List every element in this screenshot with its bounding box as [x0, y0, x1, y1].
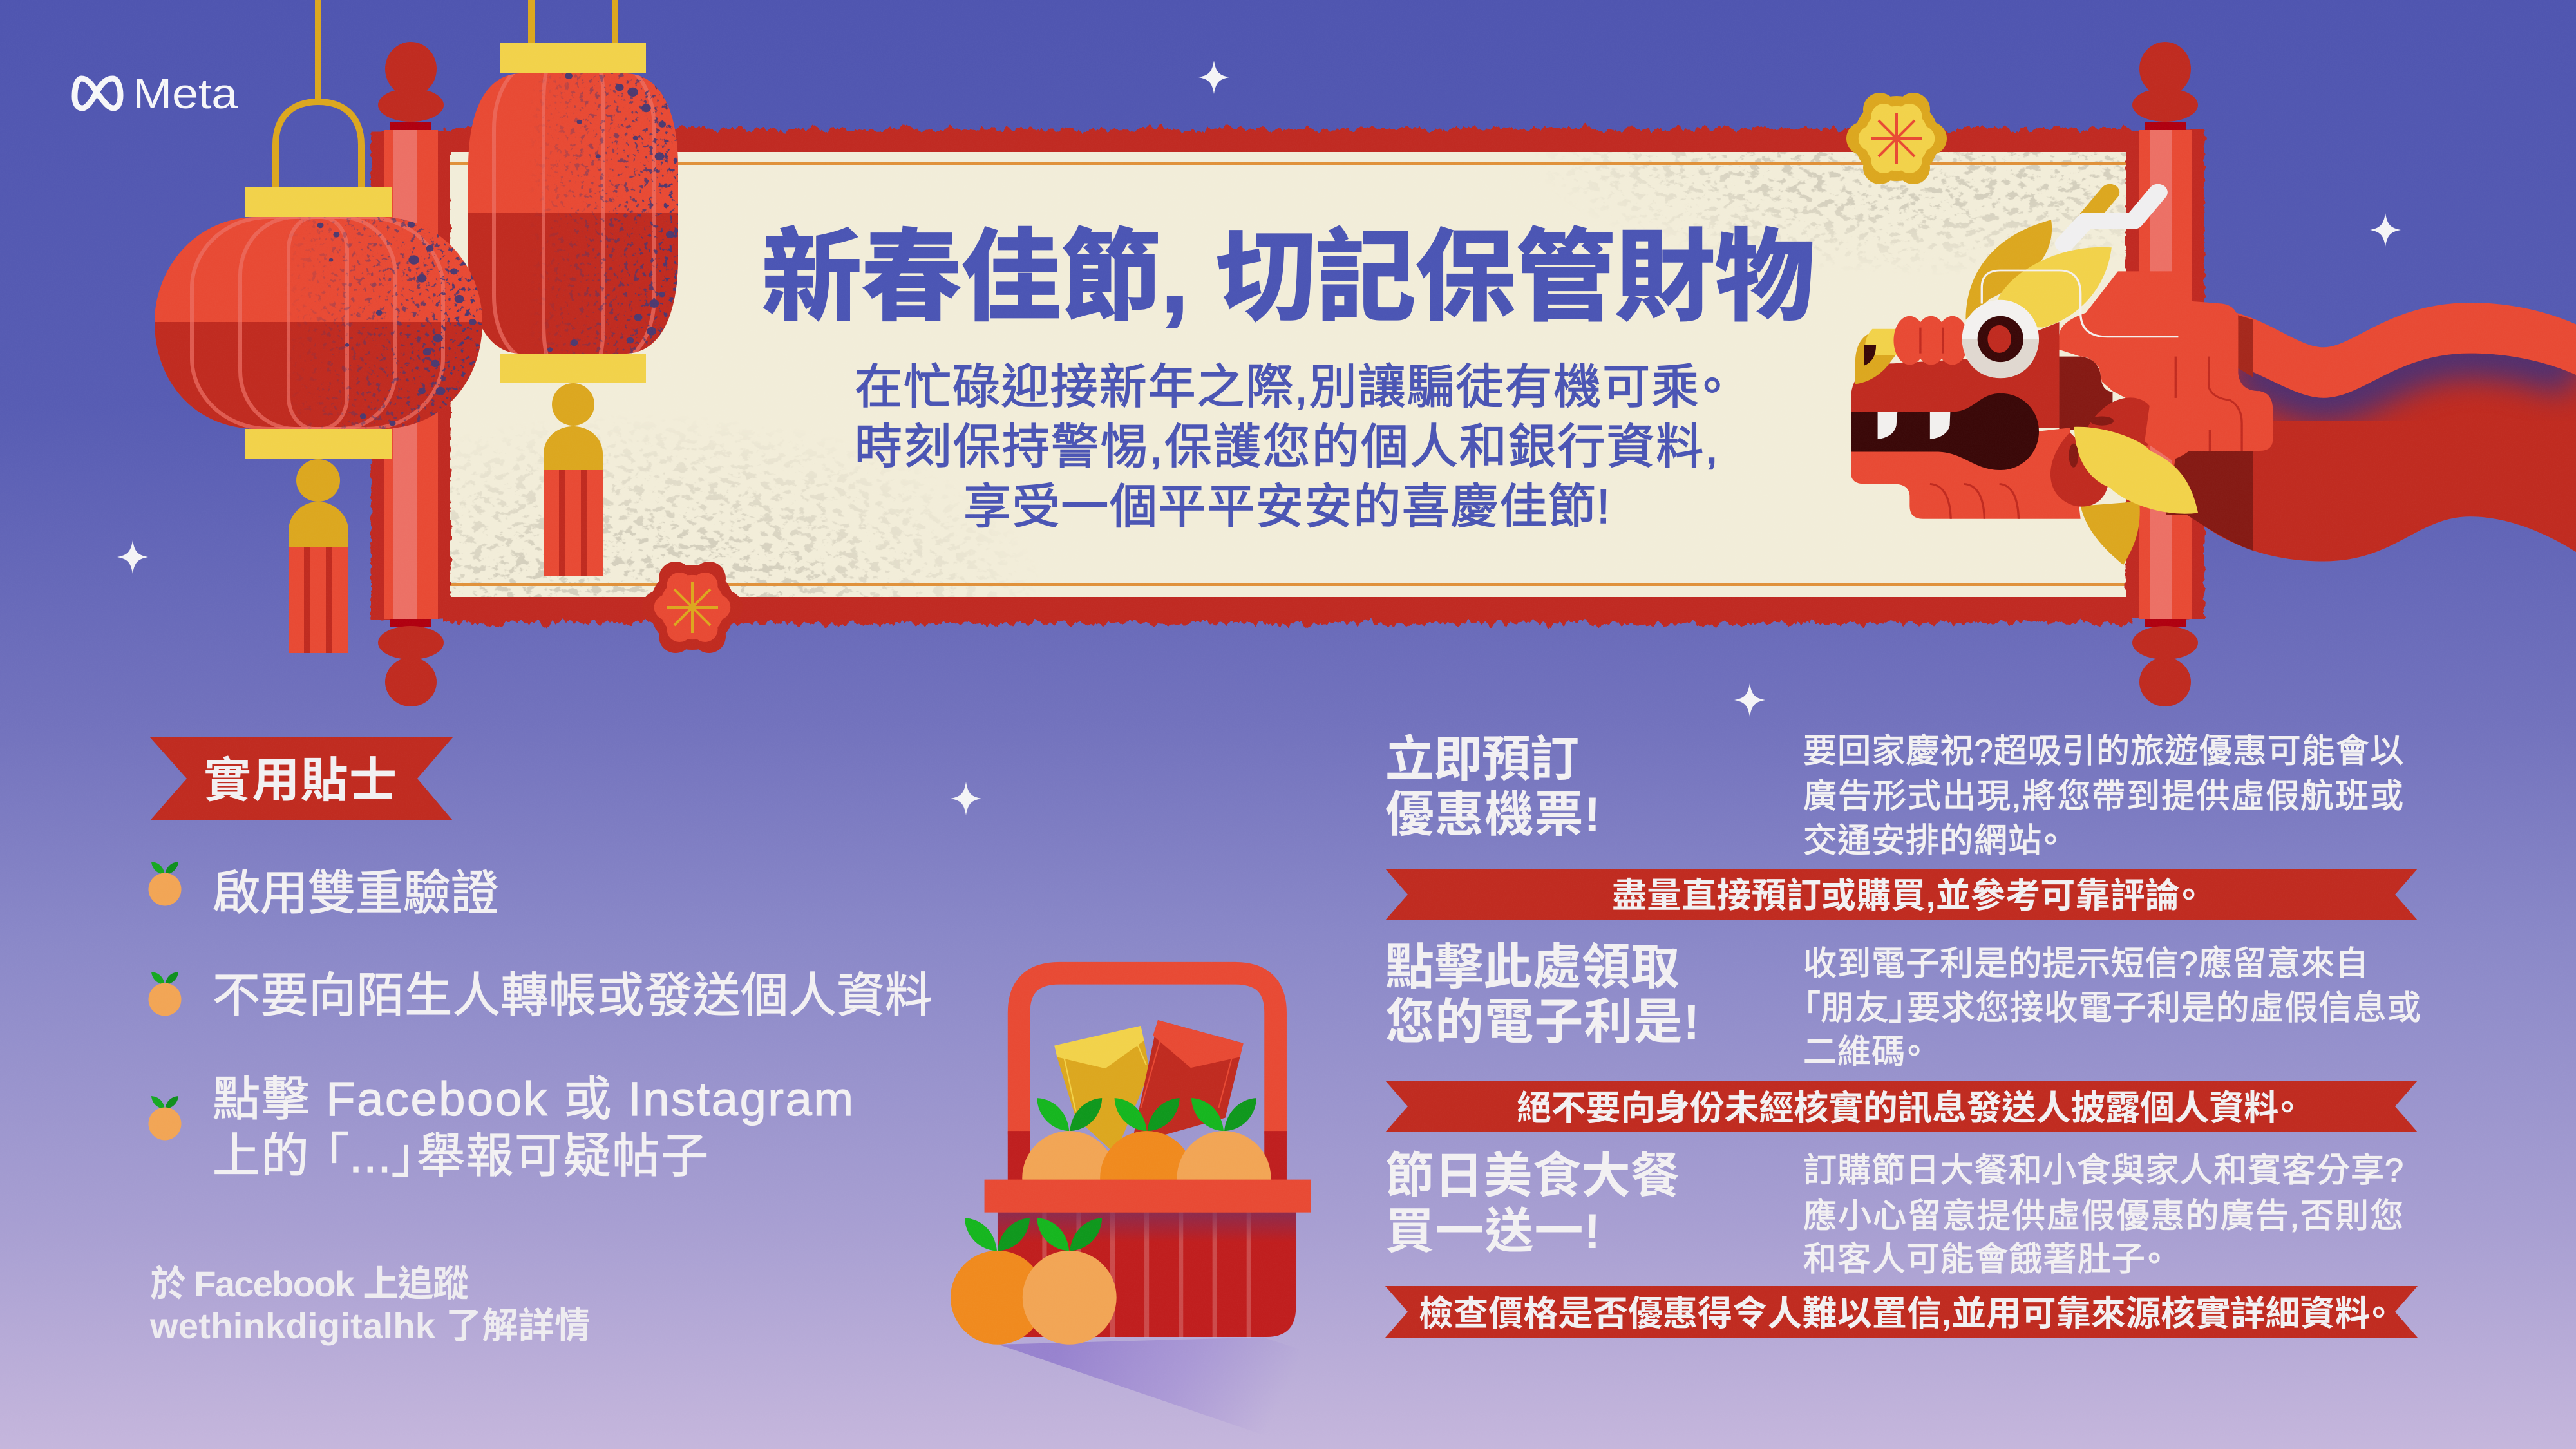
- dragon: eye: [1962, 300, 2039, 378]
- section 3: description: 和客人可能會餓著肚子。: [1803, 1232, 2163, 1280]
- basket: front oranges: [951, 1218, 1117, 1345]
- dragon: tail: [2166, 303, 2576, 561]
- section 3: description: 訂購節日大餐和小食與家人和賓客分享?: [1803, 1152, 2403, 1189]
- follow note: [149, 1264, 591, 1346]
- seal: yellow flower: [1846, 93, 1947, 184]
- basket: [951, 973, 1345, 1438]
- basket: handle: [1019, 973, 1276, 1180]
- lantern: round: [155, 0, 483, 653]
- dragon: horns: [2065, 193, 2158, 244]
- section 1: description: [1803, 733, 2403, 862]
- intro text: 時刻保持警惕,保護您的個人和銀行資料,: [855, 420, 1718, 473]
- section 2: description: 收到電子利是的提示短信?應留意來自: [1803, 945, 2369, 983]
- section 1: description: 交通安排的網站。: [1803, 813, 2059, 862]
- tip 3: [148, 1072, 853, 1186]
- dragon: line details: [1982, 270, 2178, 337]
- dragon: whisker leaves: [2050, 397, 2214, 565]
- dragon: nose: [1855, 316, 1969, 384]
- basket: shadow: [999, 1338, 1345, 1438]
- section 2: description: 「朋友」要求您接收電子利是的虛假信息或: [1803, 981, 2421, 1029]
- seal: red flower: [642, 562, 743, 653]
- scroll: paper: [450, 152, 2126, 597]
- section 1: heading: 優惠機票!: [1385, 788, 1600, 842]
- badge: tips: 實用貼士: [204, 753, 397, 807]
- scroll: left rod: [371, 42, 450, 706]
- section 3: description: 應小心留意提供虛假優惠的廣告,否則您: [1803, 1198, 2403, 1235]
- section 1: ribbon: 盡量直接預訂或購買,並參考可靠評論。: [1612, 867, 2197, 918]
- section 2: heading: 您的電子利是!: [1385, 995, 1700, 1050]
- badge: tips: [150, 737, 453, 820]
- tip 3: 點擊 Facebook 或 Instagram: [213, 1072, 853, 1126]
- sparkles: [117, 61, 2401, 815]
- section 2: description: 二維碼。: [1803, 1025, 1922, 1073]
- scroll: right rod: [2126, 42, 2204, 706]
- section 2: heading: [1385, 940, 1700, 1050]
- section 3: description: [1803, 1152, 2403, 1280]
- follow note: wethinkdigitalhk 了解詳情: [149, 1305, 591, 1346]
- logo: Meta: Meta: [133, 70, 238, 117]
- scroll: red backing: [444, 129, 2132, 623]
- logo: Meta: [75, 70, 238, 117]
- section 1: description: 要回家慶祝?超吸引的旅遊優惠可能會以: [1803, 733, 2403, 770]
- section 3: heading: 買一送一!: [1385, 1204, 1600, 1259]
- dragon: teeth: [1878, 412, 1950, 439]
- basket: red packets: [1054, 1020, 1244, 1154]
- section 3: ribbon: 檢查價格是否優惠得令人難以置信,並用可靠來源核實詳細資料。: [1419, 1285, 2387, 1336]
- section 1: ribbon: [1385, 867, 2418, 920]
- scroll banner: [371, 42, 2204, 706]
- follow note: 於 Facebook 上追蹤: [150, 1264, 469, 1304]
- dragon: [1851, 193, 2576, 565]
- title: 新春佳節, 切記保管財物: [762, 222, 1815, 333]
- section 2: heading: 點擊此處領取: [1385, 940, 1680, 995]
- dragon: lower jaw: [1851, 428, 2081, 519]
- lantern: tall: [468, 0, 678, 576]
- tip 2: 不要向陌生人轉帳或發送個人資料: [213, 969, 933, 1022]
- basket: oranges in basket: [1022, 1098, 1271, 1225]
- section 3: heading: [1385, 1149, 1680, 1259]
- section 1: description: 廣告形式出現,將您帶到提供虛假航班或: [1803, 778, 2403, 815]
- tip 3: 上的 「...」舉報可疑帖子: [213, 1117, 708, 1186]
- dragon: upper jaw: [1851, 322, 2060, 428]
- intro text: 享受一個平平安安的喜慶佳節!: [963, 480, 1610, 533]
- basket: body: [985, 1180, 1311, 1338]
- section 2: ribbon: 絕不要向身份未經核實的訊息發送人披露個人資料。: [1517, 1079, 2296, 1130]
- dragon: mane: [1965, 220, 2112, 328]
- intro text: [855, 348, 1724, 533]
- section 1: heading: [1385, 732, 1600, 842]
- section 2: description: [1803, 945, 2421, 1073]
- dragon: mouth: [1851, 393, 2039, 470]
- section 1: heading: 立即預訂: [1385, 732, 1579, 787]
- intro text: 在忙碌迎接新年之際,別讓騙徒有機可乘。: [855, 348, 1724, 417]
- tip 1: 啟用雙重驗證: [213, 866, 498, 920]
- dragon: neck: [2060, 271, 2273, 451]
- section 3: heading: 節日美食大餐: [1385, 1149, 1680, 1204]
